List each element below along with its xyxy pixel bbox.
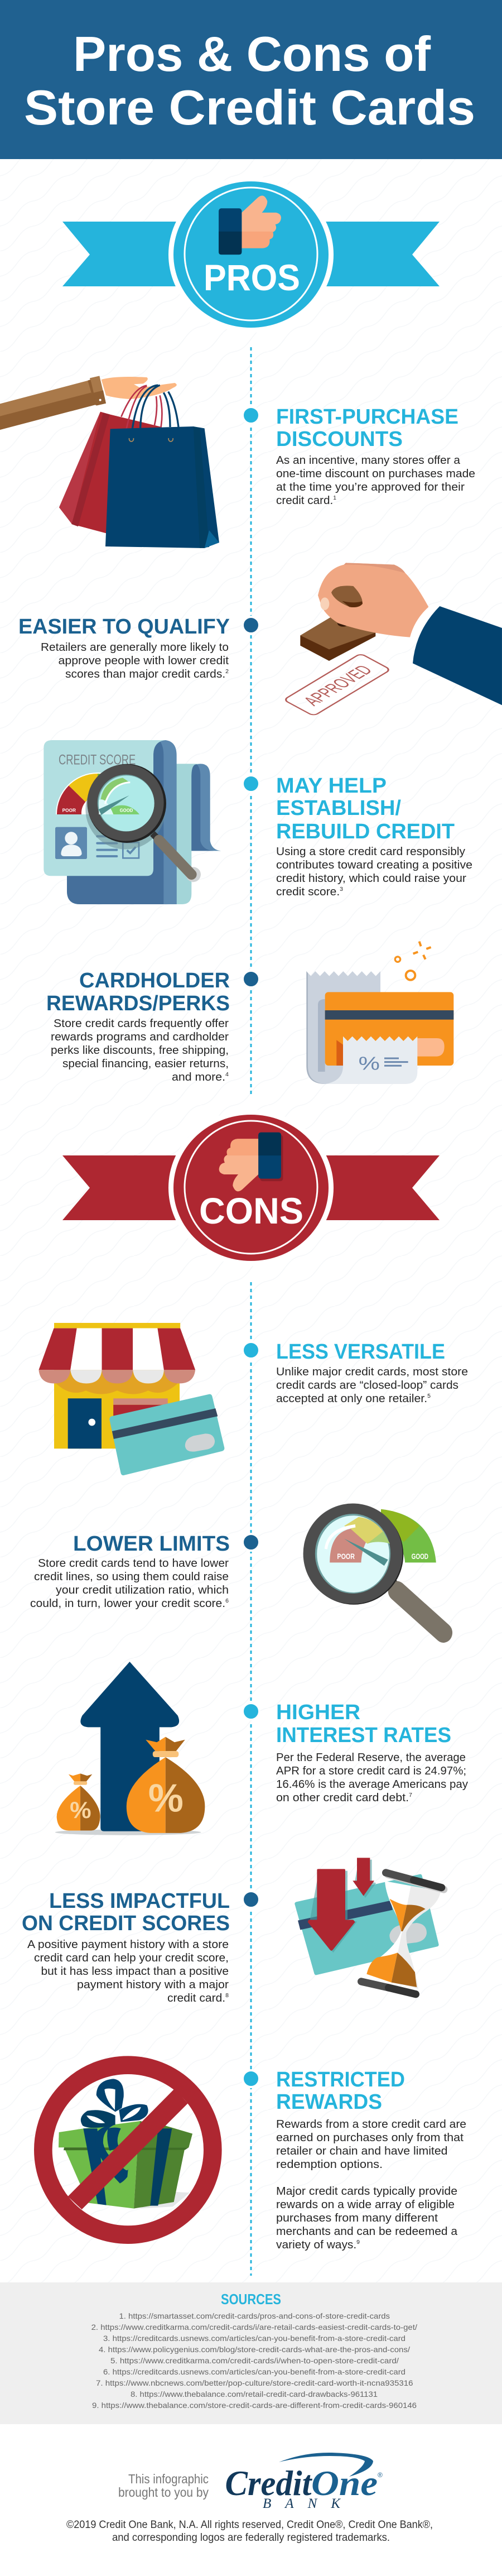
icon: thumbs up xyxy=(219,196,281,255)
logo: Credit One Bank: One xyxy=(311,2463,378,2503)
heading: MAY HELP xyxy=(276,774,387,798)
body text: purchases from many different xyxy=(276,2212,438,2224)
heading: RESTRICTED xyxy=(276,2068,405,2091)
body text: APR for a store credit card is 24.97%; xyxy=(276,1765,466,1777)
heading xyxy=(276,2068,405,2114)
body text: one-time discount on purchases made xyxy=(276,468,475,480)
icon: card, down arrows and hourglass xyxy=(297,1858,444,1994)
icon: credit score report with magnifier xyxy=(44,740,223,904)
body text: approve people with lower credit xyxy=(58,655,229,667)
source list: 2. https://www.creditkarma.com/credit-cards/i/are-retail-cards-easiest-credit-cards-to-get/ xyxy=(91,2323,417,2332)
body text: credit card. xyxy=(276,495,331,507)
marker dot xyxy=(243,1891,259,1908)
body text: credit cards are “closed-loop” cards xyxy=(276,1379,458,1392)
body text: 2 xyxy=(225,669,229,675)
icon: credit card and receipt: % xyxy=(359,1054,380,1074)
body text xyxy=(276,2118,466,2251)
panel: sources xyxy=(0,2282,502,2424)
heading xyxy=(22,1889,230,1935)
body text: credit card can help your credit score, xyxy=(34,1952,229,1964)
panel: easier to qualify xyxy=(18,563,502,716)
heading: REWARDS xyxy=(276,2090,382,2114)
marker dot xyxy=(243,1703,259,1720)
icon: magnifier over low credit gauge: GOOD xyxy=(412,1552,428,1561)
body text: 7 xyxy=(409,1792,412,1798)
body text: but it has less impact than a positive xyxy=(41,1965,229,1978)
icon: hand with approved stamp xyxy=(283,563,502,716)
panel: may help establish/rebuild credit xyxy=(44,740,472,904)
body text xyxy=(30,1557,229,1610)
body text: and more. xyxy=(172,1071,222,1083)
body text: rewards on a wide array of eligible xyxy=(276,2199,455,2211)
icon: credit card and receipt xyxy=(306,942,453,1084)
body text: variety of ways. xyxy=(276,2239,353,2251)
heading: LOWER LIMITS xyxy=(73,1532,230,1556)
source list xyxy=(91,2311,417,2410)
source list: 1. https://smartasset.com/credit-cards/pros-and-cons-of-store-credit-cards xyxy=(119,2311,390,2320)
body text: Major credit cards typically provide xyxy=(276,2185,457,2198)
icon: arrow and money bags: % xyxy=(148,1777,184,1820)
heading xyxy=(276,774,455,843)
body text: 1 xyxy=(333,495,336,501)
heading: DISCOUNTS xyxy=(276,428,403,451)
marker dot xyxy=(243,775,259,792)
body text: at the time you’re approved for their xyxy=(276,481,465,493)
body text: 8 xyxy=(225,1993,229,1999)
body text: Using a store credit card responsibly xyxy=(276,846,465,858)
title: Store Credit Cards xyxy=(24,80,475,135)
source list: 3. https://creditcards.usnews.com/articles/can-you-benefit-from-a-store-credit-card xyxy=(103,2334,406,2343)
icon: credit score report with magnifier: GOOD xyxy=(120,807,133,813)
heading xyxy=(276,1701,451,1747)
body text: could, in turn, lower your credit score. xyxy=(30,1598,215,1610)
icon: credit score report with magnifier: CREDIT SCORE xyxy=(59,752,136,767)
marker dot xyxy=(243,2070,259,2087)
body text xyxy=(41,641,229,680)
body text: 9 xyxy=(356,2239,360,2246)
body text: 3 xyxy=(340,886,343,893)
body text: perks like discounts, free shipping, xyxy=(51,1044,229,1057)
heading xyxy=(46,969,230,1015)
body text: retailer or chain and have limited xyxy=(276,2145,447,2157)
header banner xyxy=(0,0,502,159)
body text: 6 xyxy=(225,1598,229,1604)
sponsor line: brought to you by xyxy=(118,2485,209,2500)
pros ribbon badge xyxy=(62,176,440,333)
source list: 7. https://www.nbcnews.com/better/pop-culture/store-credit-card-worth-it-ncna935316 xyxy=(96,2378,413,2387)
copyright xyxy=(66,2519,433,2544)
panel: restricted rewards xyxy=(43,2065,466,2251)
body text: 16.46% is the average Americans pay xyxy=(276,1778,468,1791)
icon: arrow and money bags xyxy=(55,1662,205,1835)
body text: Rewards from a store credit card are xyxy=(276,2118,466,2131)
body text: Retailers are generally more likely to xyxy=(41,641,229,654)
source list: 5. https://www.creditkarma.com/credit-cards/i/when-to-open-store-credit-card/ xyxy=(110,2356,399,2365)
body text: redemption options. xyxy=(276,2158,383,2171)
marker dot xyxy=(243,1534,259,1551)
heading: ESTABLISH/ xyxy=(276,797,401,820)
panel: higher interest rates xyxy=(55,1662,468,1835)
body text: merchants and can be redeemed a xyxy=(276,2225,458,2238)
body text: Store credit cards tend to have lower xyxy=(38,1557,229,1570)
heading: REWARDS/PERKS xyxy=(46,992,230,1015)
body text xyxy=(276,1366,468,1405)
heading: LESS IMPACTFUL xyxy=(49,1889,230,1913)
body text: accepted at only one retailer. xyxy=(276,1393,419,1405)
body text: credit lines, so using them could raise xyxy=(34,1571,229,1583)
body text xyxy=(276,454,475,507)
sources heading: SOURCES xyxy=(221,2291,281,2308)
source list: 6. https://creditcards.usnews.com/articles/can-you-benefit-from-a-store-credit-card xyxy=(103,2367,406,2376)
source list: 4. https://www.policygenius.com/blog/store-credit-cards-what-are-the-pros-and-cons/ xyxy=(99,2345,410,2354)
title: Pros & Cons of xyxy=(73,26,431,81)
body text xyxy=(276,846,472,898)
icon: storefront with credit card xyxy=(38,1323,222,1472)
body text: Unlike major credit cards, most store xyxy=(276,1366,468,1378)
body text: As an incentive, many stores offer a xyxy=(276,454,461,467)
body text: special financing, easier returns, xyxy=(62,1058,229,1070)
heading: FIRST-PURCHASE xyxy=(276,405,458,429)
panel: less impactful on credit scores xyxy=(22,1858,444,2004)
badge label: CONS xyxy=(199,1190,303,1231)
marker dot xyxy=(243,1342,259,1359)
source list: 8. https://www.thebalance.com/retail-credit-card-drawbacks-961131 xyxy=(131,2390,378,2398)
body text: 5 xyxy=(427,1393,431,1399)
panel: first-purchase discounts xyxy=(0,376,475,548)
sponsor line: This infographic xyxy=(128,2472,209,2486)
logo: Credit One Bank: ® xyxy=(378,2471,383,2479)
panel: cardholder rewards/perks xyxy=(46,942,453,1084)
body text xyxy=(51,1018,229,1083)
copyright: and corresponding logos are federally registered trademarks. xyxy=(112,2532,390,2544)
body text xyxy=(27,1939,229,2004)
heading: REBUILD CREDIT xyxy=(276,820,455,843)
heading: EASIER TO QUALIFY xyxy=(18,615,230,639)
body text: on other credit card debt. xyxy=(276,1792,400,1804)
body text: earned on purchases only from that xyxy=(276,2132,464,2144)
logo: Credit One Bank xyxy=(225,2453,383,2511)
body text: scores than major credit cards. xyxy=(65,668,218,680)
panel: lower limits xyxy=(30,1504,443,1633)
icon: hand with approved stamp: APPROVED xyxy=(299,663,377,708)
cons ribbon badge xyxy=(62,1110,440,1266)
badge label: PROS xyxy=(204,257,300,298)
body text: A positive payment history with a store xyxy=(27,1939,229,1951)
icon: magnifier over low credit gauge xyxy=(303,1504,443,1633)
copyright: ©2019 Credit One Bank, N.A. All rights reserved, Credit One®, Credit One Bank®, xyxy=(66,2519,433,2531)
body text xyxy=(276,1752,468,1804)
body text: credit history, which could raise your xyxy=(276,872,466,885)
sponsor line xyxy=(118,2472,209,2500)
marker dot xyxy=(243,971,259,987)
body text: credit score. xyxy=(276,886,337,898)
marker dot xyxy=(243,407,259,424)
body text: Store credit cards frequently offer xyxy=(54,1018,229,1030)
heading: HIGHER xyxy=(276,1701,360,1724)
heading: LESS VERSATILE xyxy=(276,1340,445,1364)
source list: 9. https://www.thebalance.com/store-credit-cards-are-different-from-credit-cards-960146 xyxy=(92,2401,417,2410)
title xyxy=(24,26,475,135)
icon: hand holding shopping bags xyxy=(0,376,219,548)
body text: payment history with a major xyxy=(77,1979,229,1991)
heading: CARDHOLDER xyxy=(79,969,230,992)
body text: rewards programs and cardholder xyxy=(51,1031,229,1043)
icon: crossed-out gift box xyxy=(43,2065,213,2235)
body text: Per the Federal Reserve, the average xyxy=(276,1752,466,1764)
footer xyxy=(66,2453,433,2544)
heading xyxy=(276,405,458,451)
panel: less versatile xyxy=(38,1323,468,1472)
icon: thumbs down xyxy=(219,1133,283,1191)
body text: your credit utilization ratio, which xyxy=(56,1584,229,1596)
body text: credit card. xyxy=(167,1992,223,2004)
logo: Credit One Bank: Credit xyxy=(225,2463,313,2503)
body text: contributes toward creating a positive xyxy=(276,859,472,871)
marker dot xyxy=(243,617,259,634)
timeline: pros xyxy=(250,347,252,1094)
heading: ON CREDIT SCORES xyxy=(22,1912,230,1935)
heading: INTEREST RATES xyxy=(276,1724,451,1747)
body text: 4 xyxy=(225,1072,229,1078)
icon: arrow and money bags: % xyxy=(70,1797,91,1824)
logo: Credit One Bank: BANK xyxy=(263,2496,341,2511)
icon: credit score report with magnifier: POOR xyxy=(62,807,76,813)
icon: magnifier over low credit gauge: POOR xyxy=(337,1552,355,1561)
timeline: cons xyxy=(250,1282,252,2276)
